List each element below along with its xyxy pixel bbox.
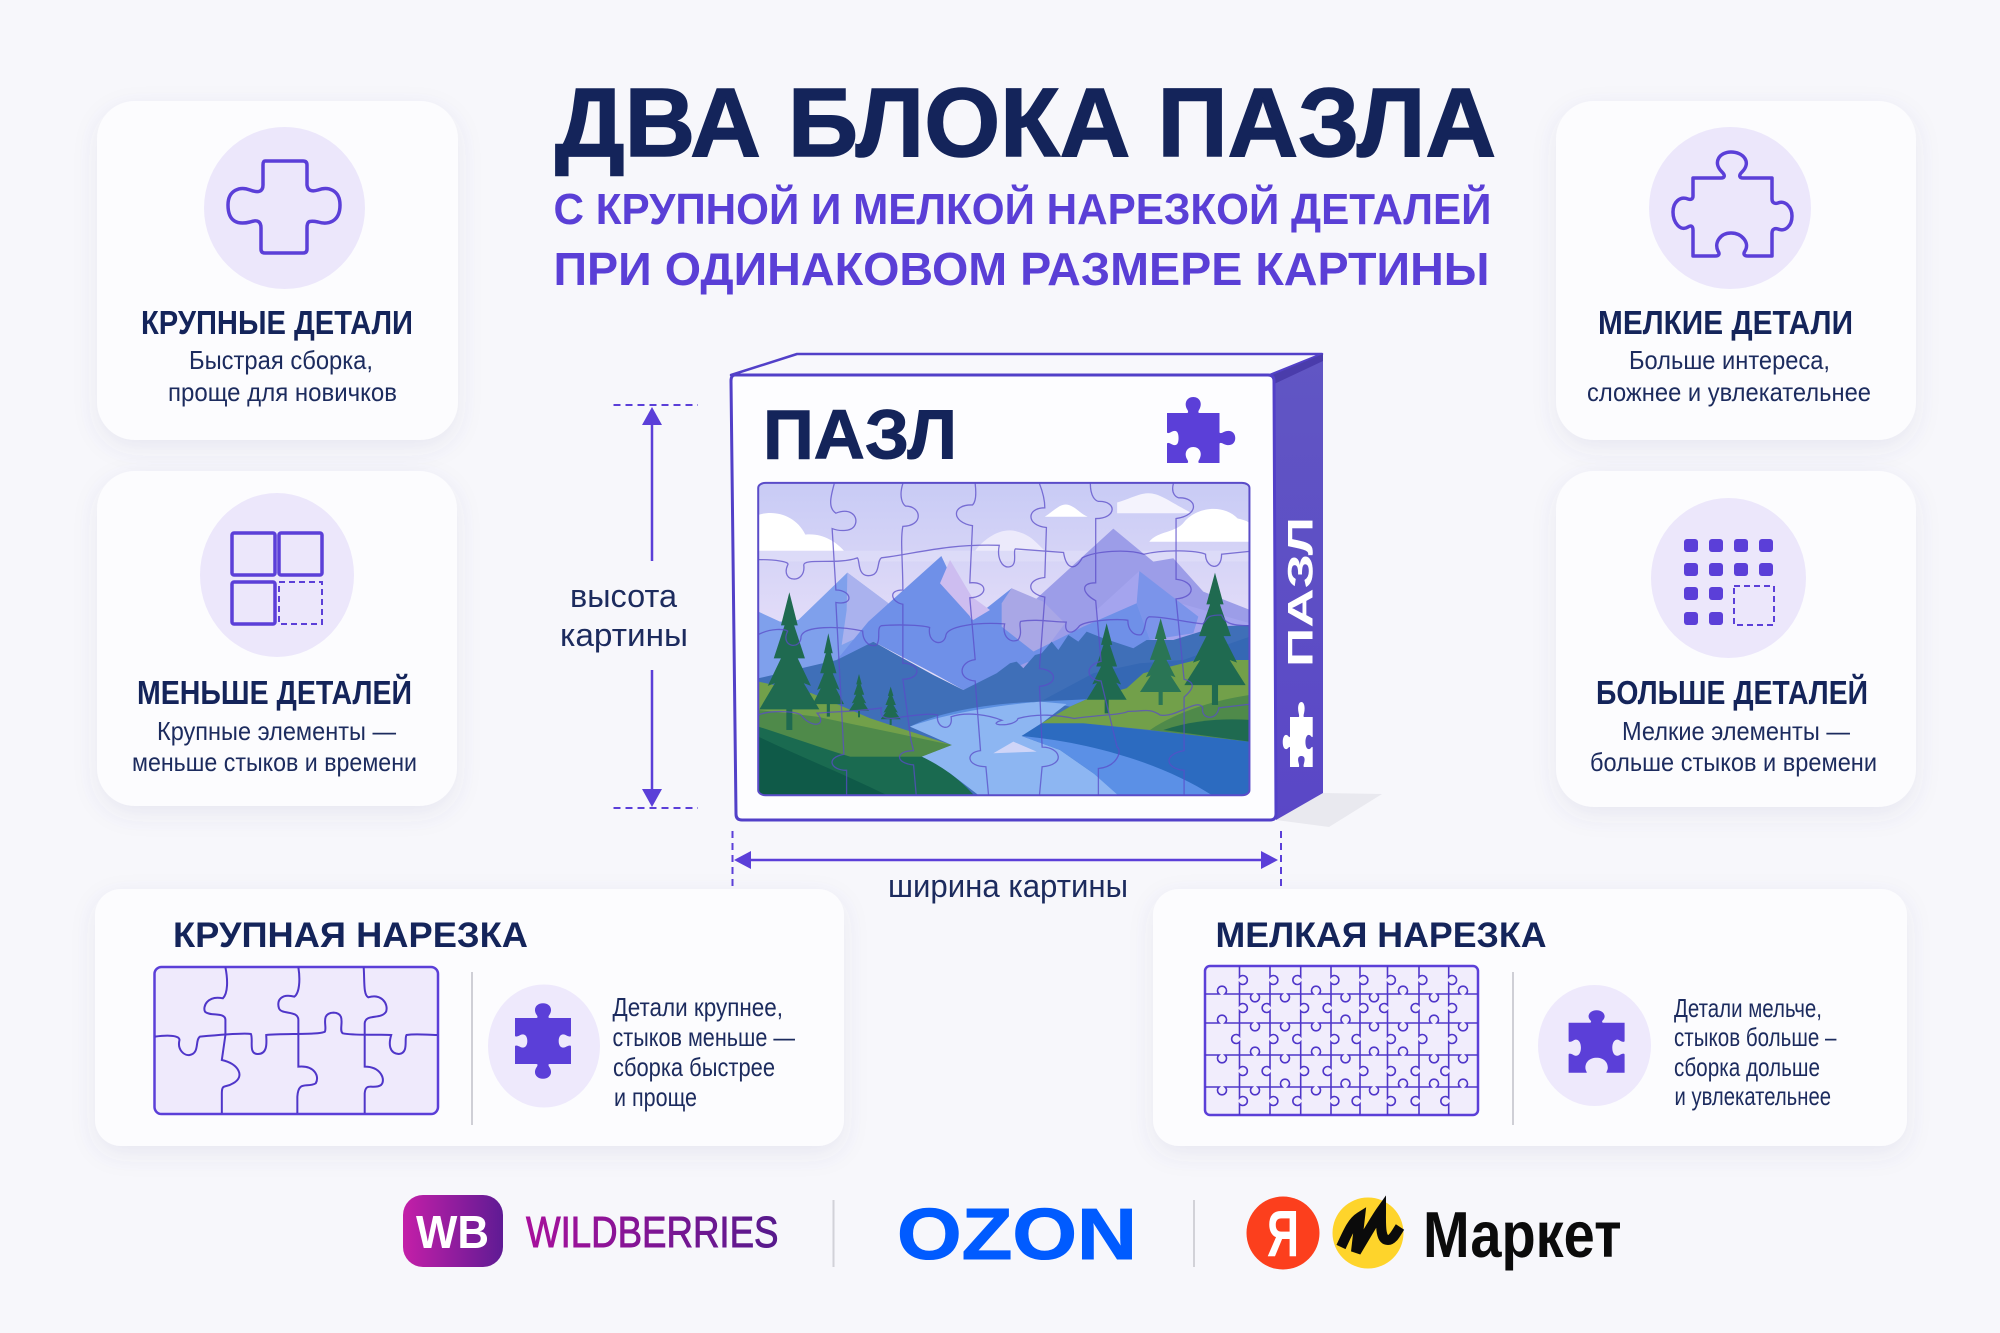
height label: высота [570, 578, 677, 614]
note text: Детали крупнее, [612, 992, 783, 1022]
landscape picture [758, 483, 1250, 800]
box side [1270, 354, 1323, 820]
description: Крупные элементы — [157, 716, 396, 746]
description: Мелкие элементы — [1622, 716, 1850, 746]
icon: puzzle piece [1538, 985, 1651, 1106]
panel: more details [1556, 471, 1916, 807]
heading: МЕНЬШЕ ДЕТАЛЕЙ [137, 673, 412, 711]
heading: МЕЛКАЯ НАРЕЗКА [1216, 916, 1546, 955]
divider [1193, 1200, 1195, 1267]
description [168, 345, 397, 407]
heading: КРУПНЫЕ ДЕТАЛИ [141, 304, 413, 341]
panel: large details [97, 101, 458, 440]
icon: four squares [200, 493, 354, 657]
logo: Ozon: OZON [897, 1195, 1137, 1275]
note text: стыков меньше — [612, 1022, 795, 1052]
description: Больше интереса, [1629, 345, 1830, 375]
logo: Yandex Market: Я [1267, 1196, 1299, 1270]
note text: стыков больше – [1674, 1022, 1837, 1052]
icon: large puzzle outline [204, 127, 365, 289]
note text: сборка быстрее [613, 1052, 775, 1082]
width dimension arrow [732, 831, 1281, 888]
icon: small puzzle outline [1649, 127, 1811, 289]
divider [471, 972, 473, 1125]
large cut puzzle diagram [154, 967, 438, 1114]
title: ДВА БЛОКА ПАЗЛА [555, 68, 1496, 177]
description [1590, 716, 1877, 777]
logo: Yandex Market: Маркет [1423, 1198, 1622, 1271]
logo: Wildberries [403, 1195, 778, 1267]
width label: ширина картины [888, 868, 1128, 904]
divider [832, 1200, 834, 1267]
description: проще для новичков [168, 377, 397, 407]
height dimension arrow [614, 405, 698, 808]
note text [1674, 993, 1837, 1111]
small cut puzzle diagram [1205, 966, 1478, 1115]
description [1587, 345, 1871, 407]
note text: и увлекательнее [1674, 1081, 1831, 1111]
logo: Wildberries: WILDBERRIES [526, 1208, 778, 1257]
box front [731, 375, 1276, 820]
box label: ПАЗЛ [763, 396, 957, 474]
subtitle block: С КРУПНОЙ И МЕЛКОЙ НАРЕЗКОЙ ДЕТАЛЕЙ [554, 183, 1492, 234]
description [132, 716, 417, 777]
note text: Детали мельче, [1674, 993, 1822, 1023]
subtitle block: ПРИ ОДИНАКОВОМ РАЗМЕРЕ КАРТИНЫ [554, 243, 1490, 295]
panel: large cut [95, 889, 844, 1146]
heading: МЕЛКИЕ ДЕТАЛИ [1598, 304, 1853, 341]
box top face [731, 354, 1322, 375]
description: меньше стыков и времени [132, 747, 417, 777]
heading: БОЛЬШЕ ДЕТАЛЕЙ [1596, 673, 1868, 711]
panel: fewer details [97, 471, 457, 806]
description: сложнее и увлекательнее [1587, 377, 1871, 407]
box side: ПАЗЛ [1282, 517, 1320, 667]
description: Быстрая сборка, [189, 345, 373, 375]
jigsaw lines on picture [758, 484, 1249, 795]
divider [1512, 972, 1514, 1125]
box shadow [1276, 793, 1382, 827]
heading: КРУПНАЯ НАРЕЗКА [173, 916, 528, 955]
note text [612, 992, 795, 1112]
icon: puzzle piece on box [1167, 397, 1235, 463]
puzzle box [731, 354, 1382, 827]
logo: Wildberries: WB [416, 1206, 489, 1258]
height label [560, 578, 688, 653]
note text: сборка дольше [1674, 1052, 1820, 1082]
description: больше стыков и времени [1590, 747, 1877, 777]
panel: small cut [1153, 889, 1907, 1146]
icon: puzzle piece [488, 984, 600, 1108]
icon: dot grid [1651, 498, 1806, 658]
logo: Yandex Market [1246, 1196, 1622, 1271]
height label: картины [560, 617, 688, 653]
note text: и проще [614, 1082, 697, 1112]
subtitle block [554, 183, 1492, 295]
panel: small details [1556, 101, 1916, 440]
